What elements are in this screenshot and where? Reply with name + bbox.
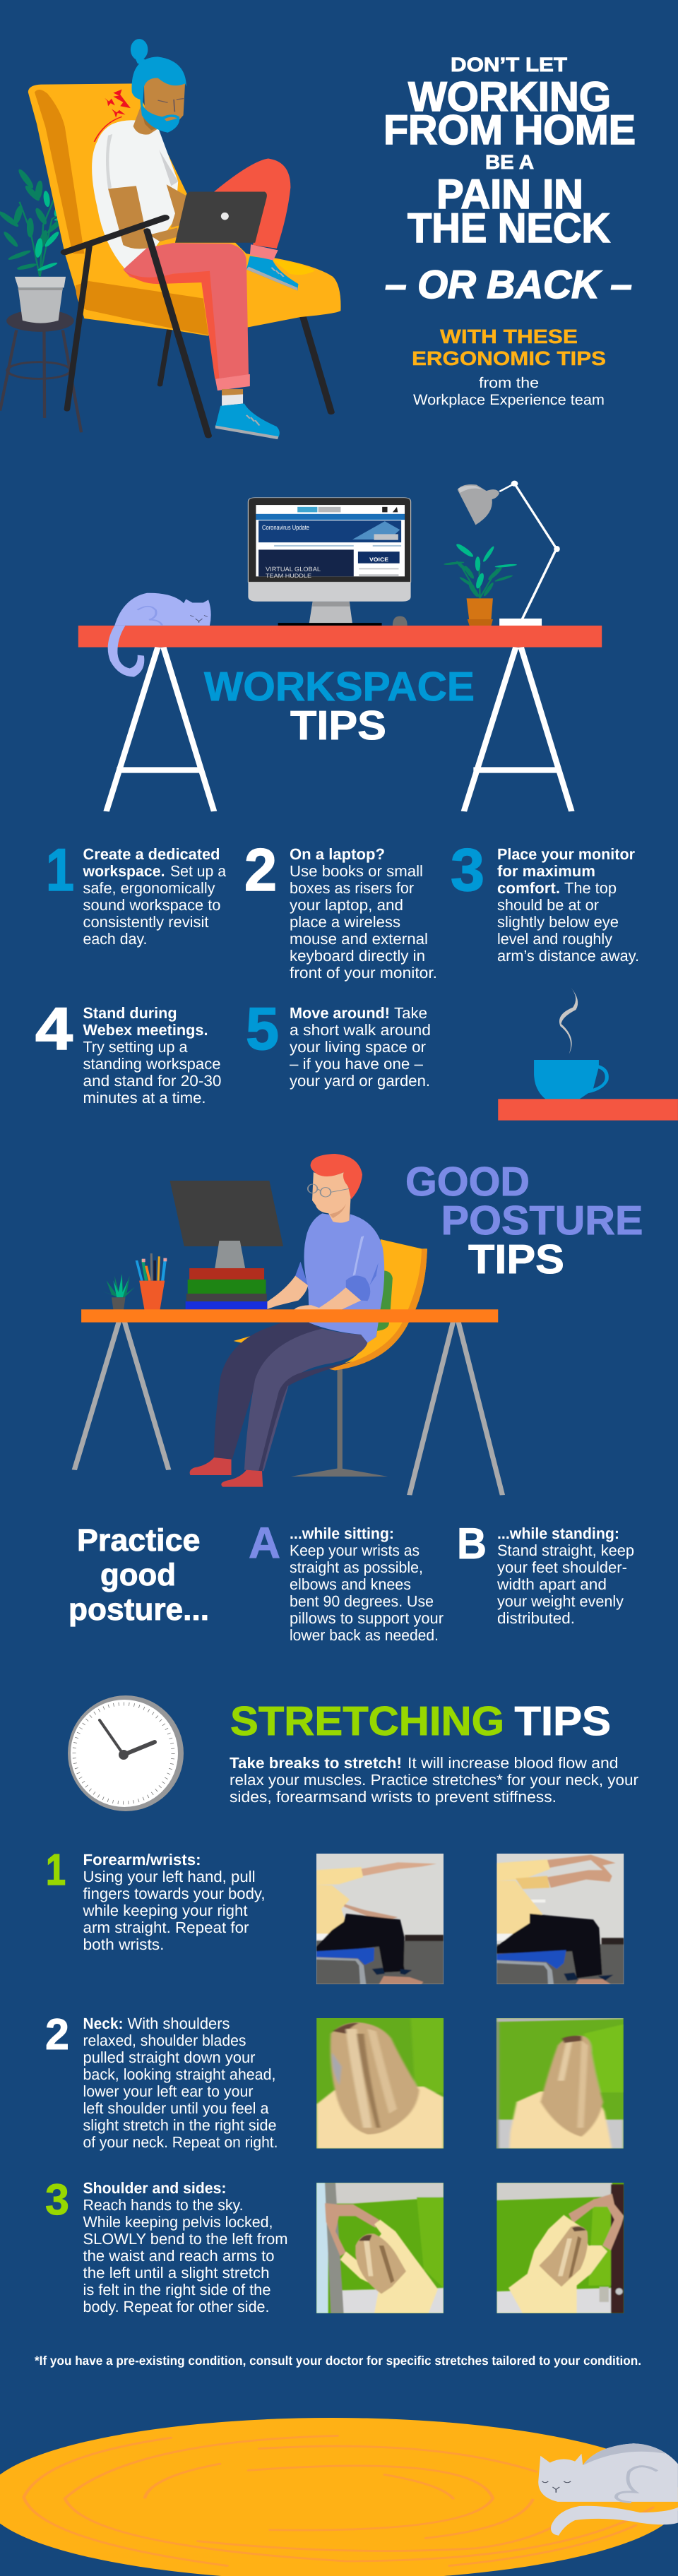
icon: laptop (175, 191, 267, 243)
tip 1: consistently revisit (83, 913, 209, 931)
title line: working: WORKING (408, 73, 611, 120)
heading word: tips: TIPS (514, 1698, 611, 1744)
icon: computer monitor body (248, 498, 411, 626)
tip 5: your yard or garden. (290, 1072, 430, 1090)
stretch 1 text: Using your left hand, pull (83, 1868, 256, 1885)
heading word: tips: TIPS (290, 703, 386, 749)
office chair (234, 1239, 427, 1477)
heading: good posture tips (405, 1159, 643, 1282)
stretch 2 text: left shoulder until you feel a (83, 2099, 269, 2117)
stretch 3 text: 3 (45, 2176, 69, 2224)
stretching intro text: It will increase blood flow and (408, 1754, 619, 1772)
stretch 1 text: Forearm/wrists: (83, 1851, 201, 1868)
icon: potted plant on stool (0, 162, 114, 432)
title line: pain in: PAIN IN (436, 171, 583, 217)
person figure (190, 1154, 384, 1487)
stretch 1 text: while keeping your right (82, 1902, 247, 1919)
lead text (69, 1523, 209, 1627)
stretch 3 text: the waist and reach arms to (83, 2247, 274, 2265)
photo: arm extended (316, 1854, 444, 1984)
stretch 2 text: lower your left ear to your (83, 2082, 253, 2100)
stretch 3 text: Reach hands to the sky. (83, 2196, 243, 2214)
stretching intro text: sides, forearmsand wrists to prevent stiffness. (230, 1788, 557, 1806)
tip A: while sitting: lower back as needed. (290, 1626, 439, 1644)
icon: desk plant (444, 543, 517, 626)
rug (0, 2418, 678, 2576)
tip 5: your living space or (290, 1038, 426, 1056)
icon: pencil cup (136, 1253, 167, 1310)
tip B: while standing: width apart and (496, 1575, 607, 1593)
title line: or back: – OR BACK – (385, 262, 632, 306)
tip 1 (46, 837, 227, 948)
tip 2: boxes as risers for (290, 879, 414, 897)
tip 1: Set up a (170, 862, 227, 880)
photo: bend left (316, 2183, 444, 2313)
stretch 3 text: body. Repeat for other side. (83, 2298, 270, 2315)
tip 1: Create a dedicated (83, 845, 220, 863)
credit: team: Workplace Experience team (413, 392, 605, 408)
title line: the neck: THE NECK (408, 205, 610, 251)
stretch 3 text: Shoulder and sides: (83, 2179, 226, 2197)
stretch 3 text: is felt in the right side of the (83, 2281, 271, 2298)
lead text: good (100, 1558, 176, 1592)
tip 4: Try setting up a (83, 1038, 188, 1056)
icon: wall clock (68, 1695, 184, 1811)
tip A: while sitting (249, 1519, 444, 1644)
tip B: while standing: Stand straight, keep (497, 1542, 634, 1559)
tip 2: Use books or small (290, 862, 423, 880)
subtitle: with these: WITH THESE (440, 326, 578, 347)
tip A: while sitting: bent 90 degrees. Use (290, 1592, 434, 1610)
heading word: good: GOOD (405, 1159, 530, 1205)
tip 4 (35, 996, 222, 1107)
heading word: stretching: STRETCHING (230, 1698, 504, 1744)
photo: bend right (496, 2183, 624, 2313)
rug swirl lines (24, 2435, 653, 2565)
stretch 2 text: relaxed, shoulder blades (83, 2032, 246, 2049)
icon: desk lamp (458, 481, 560, 626)
illustration: man on chair with laptop (0, 39, 341, 439)
stretch 2 text: 2 (45, 2010, 69, 2059)
illustration: person at desk with good posture (74, 1154, 502, 1495)
stretch 1 text (46, 1846, 266, 1953)
lead text: Practice (77, 1523, 201, 1558)
tip 5: 5 (246, 996, 279, 1063)
title block (383, 54, 636, 408)
lead text: posture... (69, 1592, 209, 1627)
illustration: workspace desk (78, 481, 602, 811)
photo: neck stretch neutral (316, 2018, 444, 2149)
tip 5: a short walk around (290, 1021, 431, 1039)
tip 2: 2 (244, 837, 277, 904)
tip 2: place a wireless (290, 913, 400, 931)
tip 4: Webex meetings. (83, 1021, 208, 1039)
stretch 3 text: While keeping pelvis locked, (83, 2213, 273, 2231)
illustration: rug with sleeping cat (0, 2418, 678, 2576)
tip 4: 4 (35, 996, 73, 1063)
tip 3: comfort. (497, 879, 560, 897)
tip A: while sitting: elbows and knees (290, 1575, 411, 1593)
title line: don't let: DON’T LET (451, 54, 567, 76)
chair armrest and front legs (65, 217, 208, 436)
desk legs (74, 1322, 502, 1495)
desk top (78, 626, 602, 648)
tip 1: workspace. (83, 862, 165, 880)
head with red hair and glasses (308, 1154, 362, 1223)
stretch 3 text (45, 2176, 288, 2315)
stretch 1 text: 1 (46, 1846, 66, 1895)
stretch 2 text: back, looking straight ahead, (83, 2065, 275, 2083)
stretch 2 text (45, 2010, 278, 2151)
tip 5 (246, 996, 431, 1090)
heading word: workspace: WORKSPACE (204, 664, 475, 710)
title line: from home: FROM HOME (383, 107, 636, 153)
tip 5: – if you have one – (290, 1055, 424, 1073)
yellow armchair (28, 83, 341, 336)
desk legs (107, 648, 571, 811)
tip B: while standing: ...while standing: (497, 1525, 619, 1542)
tip 1: 1 (46, 837, 74, 904)
heading word: tips: TIPS (468, 1236, 564, 1282)
stretch 2 text: slight stretch in the right side (83, 2116, 277, 2134)
tip 2 (244, 837, 437, 982)
tip B: while standing (457, 1520, 634, 1627)
photo: neck stretch tilted (496, 2018, 624, 2149)
tip 3: should be at or (497, 896, 599, 914)
heading: workspace tips (204, 664, 475, 749)
stretch 2 text: pulled straight down your (83, 2049, 256, 2066)
stretching intro text (230, 1754, 638, 1806)
icon: small plant (102, 1273, 135, 1310)
tip A: while sitting: pillows to support your (290, 1609, 444, 1627)
photos: forearm stretch (316, 1854, 624, 1984)
tip 4: standing workspace (83, 1055, 220, 1073)
photo: wrist pulled back (496, 1854, 624, 1984)
tip 2: mouse and external (290, 930, 428, 948)
heading word: posture: POSTURE (441, 1198, 643, 1244)
tip 3: arm’s distance away. (497, 947, 639, 965)
stretch 3 text: SLOWLY bend to the left from (83, 2230, 288, 2248)
tip 1: safe, ergonomically (83, 879, 215, 897)
screen text: team huddle: TEAM HUDDLE (266, 573, 311, 579)
stretch 2 text: of your neck. Repeat on right. (83, 2133, 278, 2151)
tip 4: Stand during (83, 1004, 177, 1022)
stretch 1 text: arm straight. Repeat for (83, 1919, 249, 1936)
tip 2: keyboard directly in (290, 947, 425, 965)
tip 3 (451, 837, 639, 965)
photos: shoulder and side stretch (316, 2183, 624, 2313)
photos: neck stretch (316, 2018, 624, 2149)
panel: practice good posture (69, 1519, 634, 1644)
tip 3: slightly below eye (497, 913, 619, 931)
tip 4: and stand for 20-30 (83, 1072, 222, 1090)
footnote: *If you have a pre-existing condition, consult your doctor for specific stretches tailored to your condition. (35, 2354, 641, 2368)
stretch 1 text: both wrists. (83, 1936, 164, 1953)
screen text: voice: VOICE (369, 556, 389, 563)
desk top (81, 1309, 498, 1323)
icon: sleeping purple cat (108, 593, 211, 677)
icon: red pain bolts (94, 90, 131, 142)
tip 3: Place your monitor (497, 845, 635, 863)
head with blue hair and beard (131, 39, 186, 135)
tip 5: Take (394, 1004, 427, 1022)
stretch 1 text: fingers towards your body, (83, 1885, 266, 1902)
tip 5: Move around! (290, 1004, 390, 1022)
panel: workspace tips list (35, 837, 639, 1107)
tip 3: 3 (451, 837, 484, 904)
tip B: while standing: your feet shoulder- (497, 1558, 627, 1576)
screen text: coronavirus update: Coronavirus Update (262, 524, 309, 531)
icon: mouse (393, 616, 408, 626)
tip B: while standing: your weight evenly (497, 1592, 624, 1610)
tip 3: for maximum (497, 862, 595, 880)
stretch 2 text: With shoulders (127, 2015, 230, 2032)
tip 3: The top (564, 879, 617, 897)
tip A: while sitting: Keep your wrists as (290, 1542, 420, 1559)
tip 3: level and roughly (497, 930, 612, 948)
man figure (92, 39, 298, 439)
tip B: while standing: distributed. (497, 1609, 575, 1627)
tip 2: front of your monitor. (290, 964, 437, 982)
chair back legs (160, 316, 331, 412)
stretching intro text: relax your muscles. Practice stretches* for your neck, your (230, 1771, 638, 1789)
tip 1: sound workspace to (83, 896, 220, 914)
tip 1: each day. (83, 930, 147, 948)
tip 2: your laptop, and (290, 896, 403, 914)
tip A: while sitting: A (249, 1519, 280, 1568)
subtitle: ergonomic tips: ERGONOMIC TIPS (412, 347, 606, 369)
stretch 2 text: Neck: (83, 2015, 123, 2032)
monitor screen text (262, 524, 389, 579)
computer monitor on books (170, 1181, 283, 1310)
icon: sleeping grey cat (538, 2443, 678, 2536)
icon: steaming coffee cup on shelf (498, 987, 678, 1121)
tip A: while sitting: straight as possible, (290, 1558, 423, 1576)
stretch 3 text: the left until a slight stretch (83, 2264, 270, 2282)
tip A: while sitting: ...while sitting: (290, 1525, 394, 1542)
credit: from the: from the (479, 375, 539, 391)
screen text: virtual global: VIRTUAL GLOBAL (266, 566, 321, 573)
tip 4: minutes at a time. (83, 1089, 206, 1107)
tip B: while standing: B (457, 1520, 487, 1568)
heading: stretching tips (230, 1698, 611, 1744)
stretching intro text: Take breaks to stretch! (230, 1754, 402, 1772)
title line: be a: BE A (485, 151, 534, 173)
tip 2: On a laptop? (290, 845, 385, 863)
